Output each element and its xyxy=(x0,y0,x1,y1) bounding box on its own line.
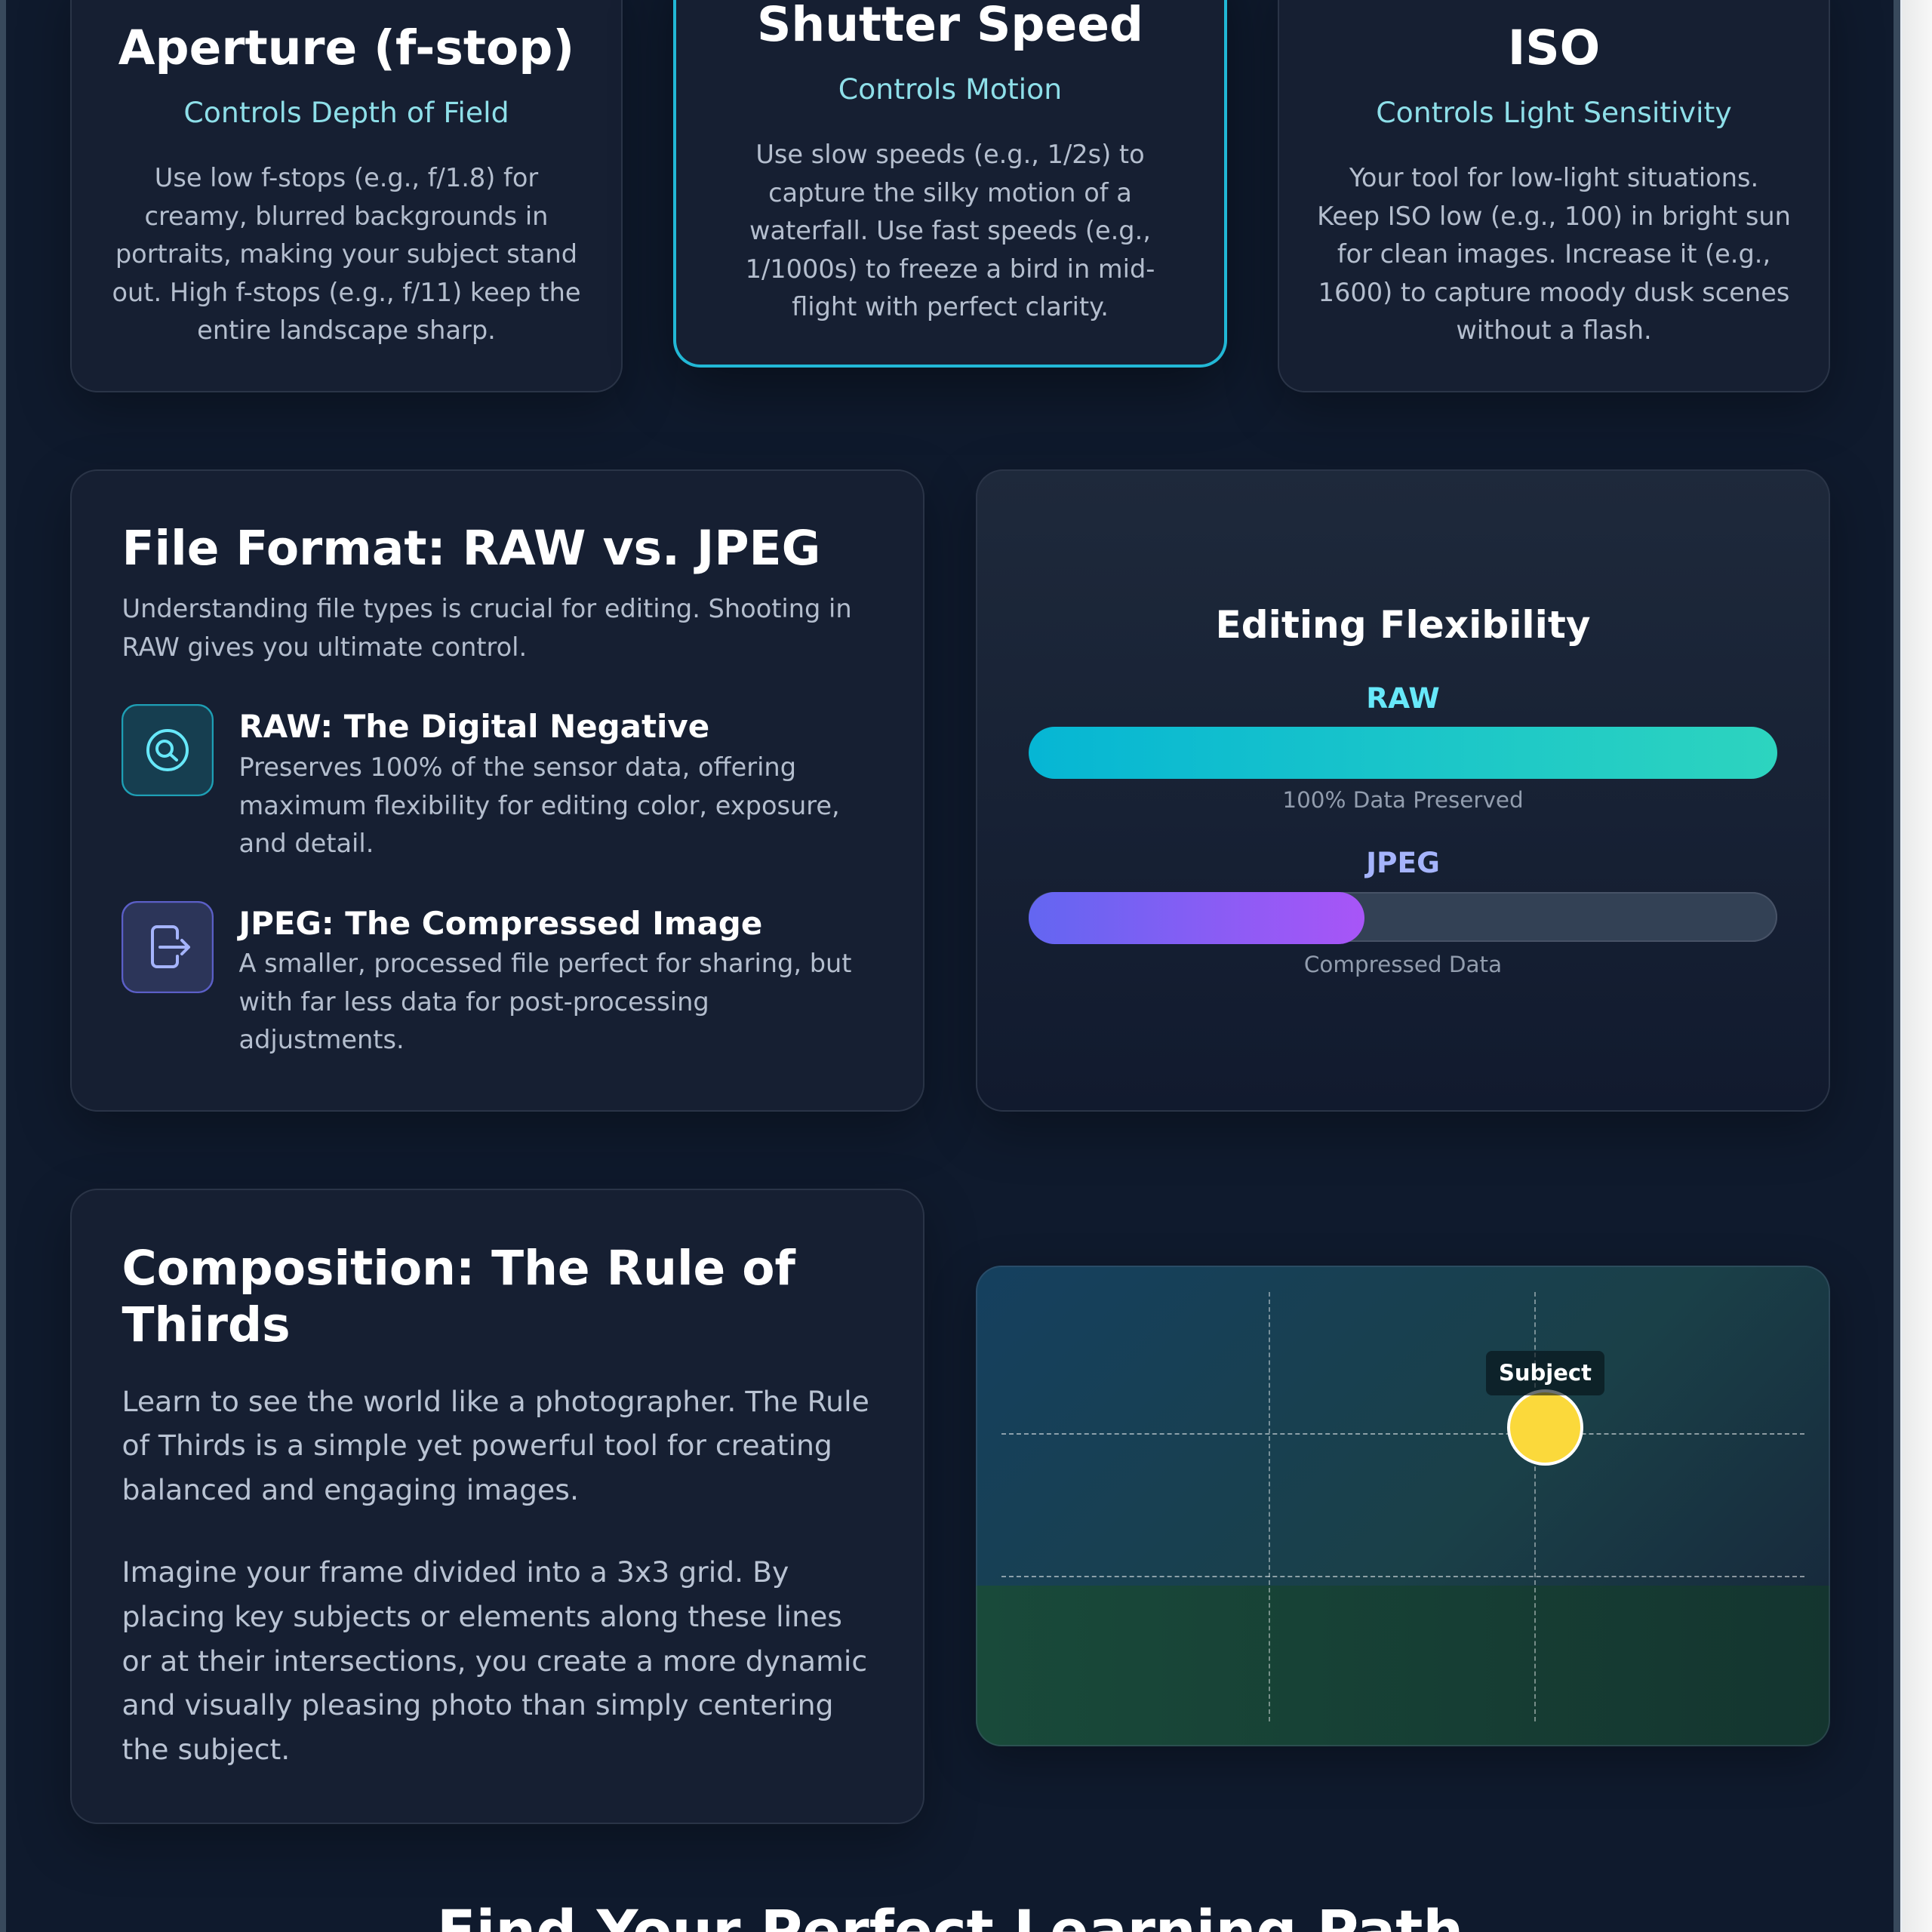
bar: JPEG xyxy=(1029,892,1777,944)
text: shutter description xyxy=(746,140,1155,321)
text: shutter description: waterfall. Use fast speeds (e.g., xyxy=(749,216,1151,245)
ground xyxy=(976,1586,1830,1746)
text: RAW description xyxy=(238,752,840,858)
text: composition paragraph one: of Thirds is a simple yet powerful tool for creating xyxy=(122,1429,832,1462)
text: file format intro xyxy=(122,594,852,661)
text: composition paragraph two: and visually pleasing photo than simply centering xyxy=(122,1688,833,1721)
subject label xyxy=(1486,1351,1604,1395)
text: ISO description: 1600) to capture moody dusk scenes xyxy=(1318,278,1789,306)
text: aperture description: out. High f-stops (e.g., f/11) keep the xyxy=(112,278,581,306)
panel: file format xyxy=(70,469,924,1112)
panel: ISO card xyxy=(1278,0,1830,392)
panel: shutter speed card xyxy=(673,0,1227,368)
text: ISO description: Keep ISO low (e.g., 100) in bright sun xyxy=(1317,201,1791,231)
subheading: ISO: Controls Light Sensitivity xyxy=(1376,95,1732,128)
heading: ISO: ISO xyxy=(1508,20,1600,75)
text: RAW description: and detail. xyxy=(238,829,374,858)
icon: JPEG export xyxy=(122,901,214,993)
diagram: rule of thirds xyxy=(976,1266,1830,1746)
text: ISO description: for clean images. Increase it (e.g., xyxy=(1337,239,1770,269)
text: aperture description: Use low f-stops (e.g., f/1.8) for xyxy=(155,163,538,192)
panel: composition text xyxy=(70,1188,924,1823)
subject label: Subject xyxy=(1499,1360,1592,1386)
text: RAW description: maximum flexibility for editing color, exposure, xyxy=(238,791,840,820)
text: ISO description xyxy=(1317,163,1791,345)
text: file format intro: RAW gives you ultimate control. xyxy=(122,632,527,661)
text: composition paragraph two: placing key subjects or elements along these lines xyxy=(122,1600,842,1633)
text: JPEG description: with far less data for post-processing xyxy=(238,987,709,1016)
bar: RAW xyxy=(1029,727,1777,779)
heading: aperture: Aperture (f-stop) xyxy=(118,20,574,75)
text: shutter description: 1/1000s) to freeze a bird in mid- xyxy=(746,254,1155,284)
subject dot xyxy=(1507,1389,1583,1466)
text: ISO description: without a flash. xyxy=(1456,315,1652,345)
heading: composition: Composition: The Rule of xyxy=(122,1241,795,1295)
label: JPEG: JPEG xyxy=(1366,846,1440,879)
text: aperture description: portraits, making your subject stand xyxy=(115,239,577,269)
text: JPEG description: A smaller, processed file perfect for sharing, but xyxy=(238,949,851,978)
text: composition paragraph two: the subject. xyxy=(122,1733,290,1766)
text: aperture description xyxy=(112,163,581,345)
text: JPEG description: adjustments. xyxy=(238,1025,405,1054)
text: RAW description: Preserves 100% of the sensor data, offering xyxy=(238,752,796,782)
text: ISO description: Your tool for low-light situations. xyxy=(1349,163,1758,192)
heading: file format: File Format: RAW vs. JPEG xyxy=(122,521,820,576)
icon: RAW magnifier xyxy=(122,704,214,796)
text: JPEG description xyxy=(238,949,851,1054)
text: composition paragraph one xyxy=(122,1384,869,1506)
text: file format intro: Understanding file types is crucial for editing. Shooting in xyxy=(122,594,852,623)
text: shutter description: Use slow speeds (e.g., 1/2s) to xyxy=(755,140,1145,169)
text: composition paragraph two: Imagine your frame divided into a 3x3 grid. By xyxy=(122,1555,789,1589)
subheading: aperture: Controls Depth of Field xyxy=(183,95,509,128)
text: composition paragraph two: or at their intersections, you create a more dynamic xyxy=(122,1644,867,1678)
subheading: shutter speed: Controls Motion xyxy=(838,72,1062,106)
text: aperture description: creamy, blurred backgrounds in xyxy=(145,201,548,231)
text: shutter description: capture the silky motion of a xyxy=(768,178,1132,207)
heading: composition xyxy=(122,1241,795,1352)
text: composition paragraph two xyxy=(122,1555,867,1766)
text: RAW title: RAW: The Digital Negative xyxy=(238,708,709,745)
text: aperture description: entire landscape sharp. xyxy=(197,315,496,345)
label: RAW: RAW xyxy=(1366,681,1440,714)
text: shutter description: flight with perfect clarity. xyxy=(792,292,1109,321)
heading: composition: Thirds xyxy=(122,1297,291,1352)
panel: editing flexibility chart xyxy=(976,469,1830,1112)
caption: RAW bar: 100% Data Preserved xyxy=(1282,787,1524,813)
panel: aperture card xyxy=(70,0,623,392)
text: composition paragraph one: Learn to see the world like a photographer. The Rule xyxy=(122,1384,869,1417)
text: composition paragraph one: balanced and engaging images. xyxy=(122,1473,579,1506)
caption: JPEG bar: Compressed Data xyxy=(1304,952,1502,977)
heading: editing flexibility: Editing Flexibility xyxy=(1215,602,1591,647)
text: JPEG title: JPEG: The Compressed Image xyxy=(238,905,762,942)
